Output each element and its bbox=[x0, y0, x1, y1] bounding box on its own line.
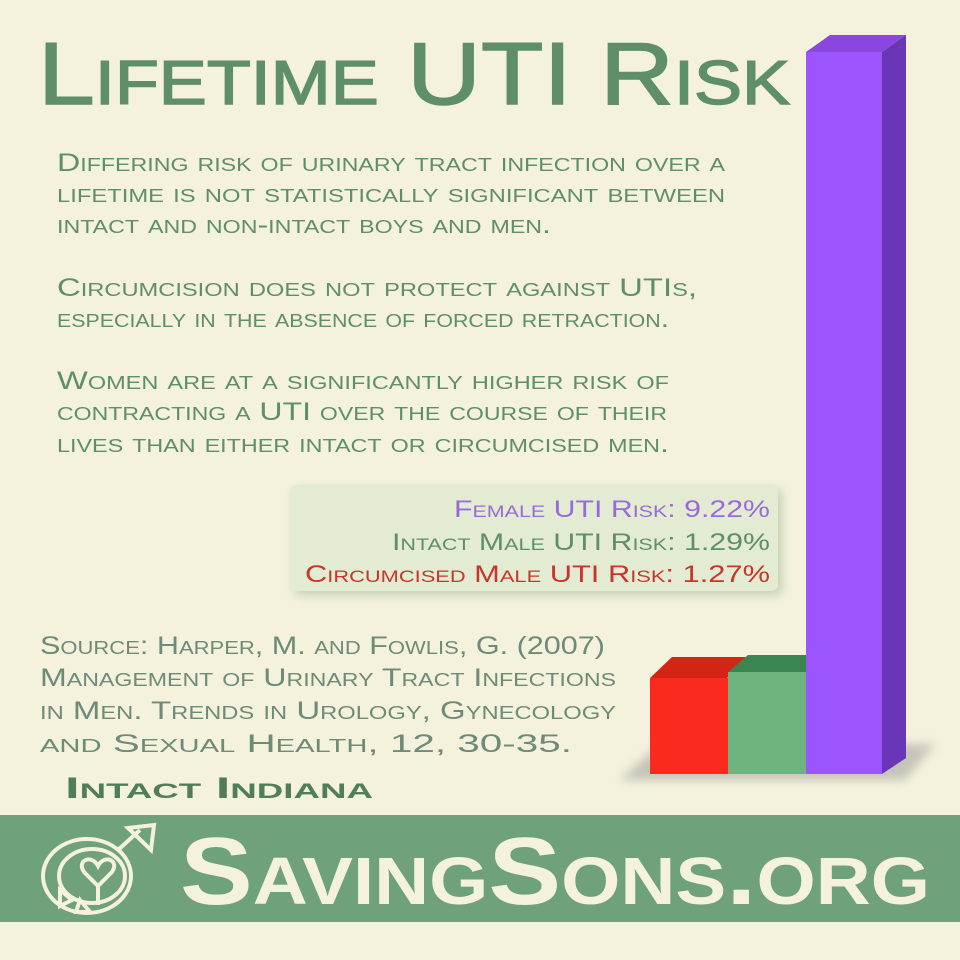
bar: female bbox=[806, 35, 906, 774]
legend box: Intact Male UTI Risk: 1.29% bbox=[392, 529, 770, 556]
banner text: SavingSons.org bbox=[180, 818, 930, 925]
text block: intro: Circumcision does not protect against UTIs, bbox=[57, 274, 697, 302]
bar chart bbox=[620, 35, 935, 780]
legend box: Female UTI Risk: 9.22% bbox=[454, 496, 770, 523]
source citation: and Sexual Health, 12, 30-35. bbox=[40, 730, 572, 758]
bar: circumcised bbox=[650, 657, 750, 774]
legend box: Circumcised Male UTI Risk: 1.27% bbox=[305, 561, 770, 588]
title: Lifetime UTI Risk bbox=[38, 24, 790, 123]
legend box bbox=[290, 485, 782, 595]
source citation: in Men. Trends in Urology, Gynecology bbox=[40, 697, 616, 725]
source citation: Source: Harper, M. and Fowlis, G. (2007) bbox=[40, 632, 605, 660]
text block: intro: Differing risk of urinary tract infection over a bbox=[57, 149, 725, 177]
text block: intro: Women are at a significantly higher risk of bbox=[57, 367, 669, 395]
text block: intro: especially in the absence of forced retraction. bbox=[57, 305, 669, 333]
source citation: Management of Urinary Tract Infections bbox=[40, 664, 616, 692]
source citation bbox=[40, 632, 616, 758]
footer banner bbox=[0, 815, 960, 925]
text block: intro: lifetime is not statistically significant between bbox=[57, 180, 725, 208]
brand: Intact Indiana: Intact Indiana bbox=[65, 772, 373, 805]
icon: male symbol with heart and peace bbox=[43, 825, 154, 913]
text block: intro: contracting a UTI over the course of their bbox=[57, 398, 667, 426]
text block: intro bbox=[57, 149, 725, 458]
text block: intro: intact and non-intact boys and men. bbox=[57, 211, 551, 239]
bar: intact bbox=[728, 655, 806, 774]
text block: intro: lives than either intact or circumcised men. bbox=[57, 430, 669, 458]
